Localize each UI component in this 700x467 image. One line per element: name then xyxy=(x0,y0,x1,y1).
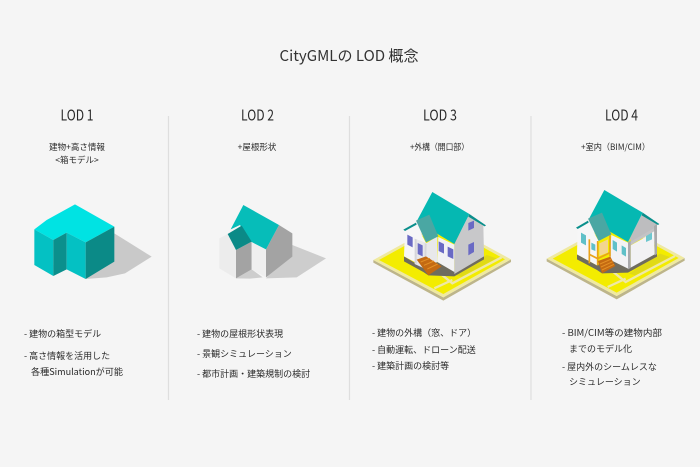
bullets: LOD 2: - 建物の屋根形状表現 xyxy=(197,327,283,340)
bullets: LOD 1: 各種Simulationが可能 xyxy=(31,365,123,378)
panel: LOD 4 xyxy=(547,104,685,388)
heading: LOD 2: LOD 2 xyxy=(241,104,274,126)
title: CityGMLの LOD 概念 xyxy=(280,45,418,66)
subtitle: LOD 2: +屋根形状 xyxy=(238,141,277,153)
bullets: LOD 3 xyxy=(372,326,476,372)
bullets: LOD 4: シミュレーション xyxy=(569,375,641,388)
icon: box building xyxy=(34,204,152,279)
panel: LOD 2 xyxy=(197,104,326,380)
icon: detailed house on plot xyxy=(373,192,511,301)
bullets: LOD 1 xyxy=(24,327,123,378)
heading: LOD 3: LOD 3 xyxy=(423,104,457,126)
bullets: LOD 3: - 建物の外構（窓、ドア） xyxy=(372,326,476,339)
bullets: LOD 4 xyxy=(562,326,662,388)
panel: LOD 3 xyxy=(372,104,511,372)
heading: LOD 1: LOD 1 xyxy=(60,104,94,126)
bullets: LOD 1: - 高さ情報を活用した xyxy=(24,349,110,362)
bullets: LOD 4: - 屋内外のシームレスな xyxy=(562,360,657,373)
icon: house with interior on plot xyxy=(547,190,685,299)
icon: house with roof shape xyxy=(219,205,326,279)
bullets: LOD 4: - BIM/CIM等の建物内部 xyxy=(562,326,662,339)
plot xyxy=(373,222,511,301)
bullets: LOD 2: - 都市計画・建築規制の検討 xyxy=(197,367,310,380)
bullets: LOD 1: - 建物の箱型モデル xyxy=(24,327,101,340)
house xyxy=(576,190,659,273)
bullets: LOD 2: - 景観シミュレーション xyxy=(197,347,292,360)
subtitle: LOD 1 xyxy=(49,141,105,166)
bullets: LOD 3: - 自動運転、ドローン配送 xyxy=(372,343,476,356)
plot xyxy=(547,221,685,299)
bullets: LOD 3: - 建築計画の検討等 xyxy=(372,359,449,372)
house xyxy=(403,192,486,276)
subtitle: LOD 4: +室内（BIM/CIM） xyxy=(581,141,650,153)
subtitle: LOD 1: 建物+高さ情報 xyxy=(49,141,105,153)
bullets: LOD 2 xyxy=(197,327,310,380)
subtitle: LOD 3: +外構（開口部） xyxy=(410,141,469,153)
panel: LOD 1 xyxy=(24,104,152,378)
subtitle: LOD 1: <箱モデル> xyxy=(55,154,99,166)
bullets: LOD 4: までのモデル化 xyxy=(569,342,632,355)
heading: LOD 4: LOD 4 xyxy=(605,104,638,126)
